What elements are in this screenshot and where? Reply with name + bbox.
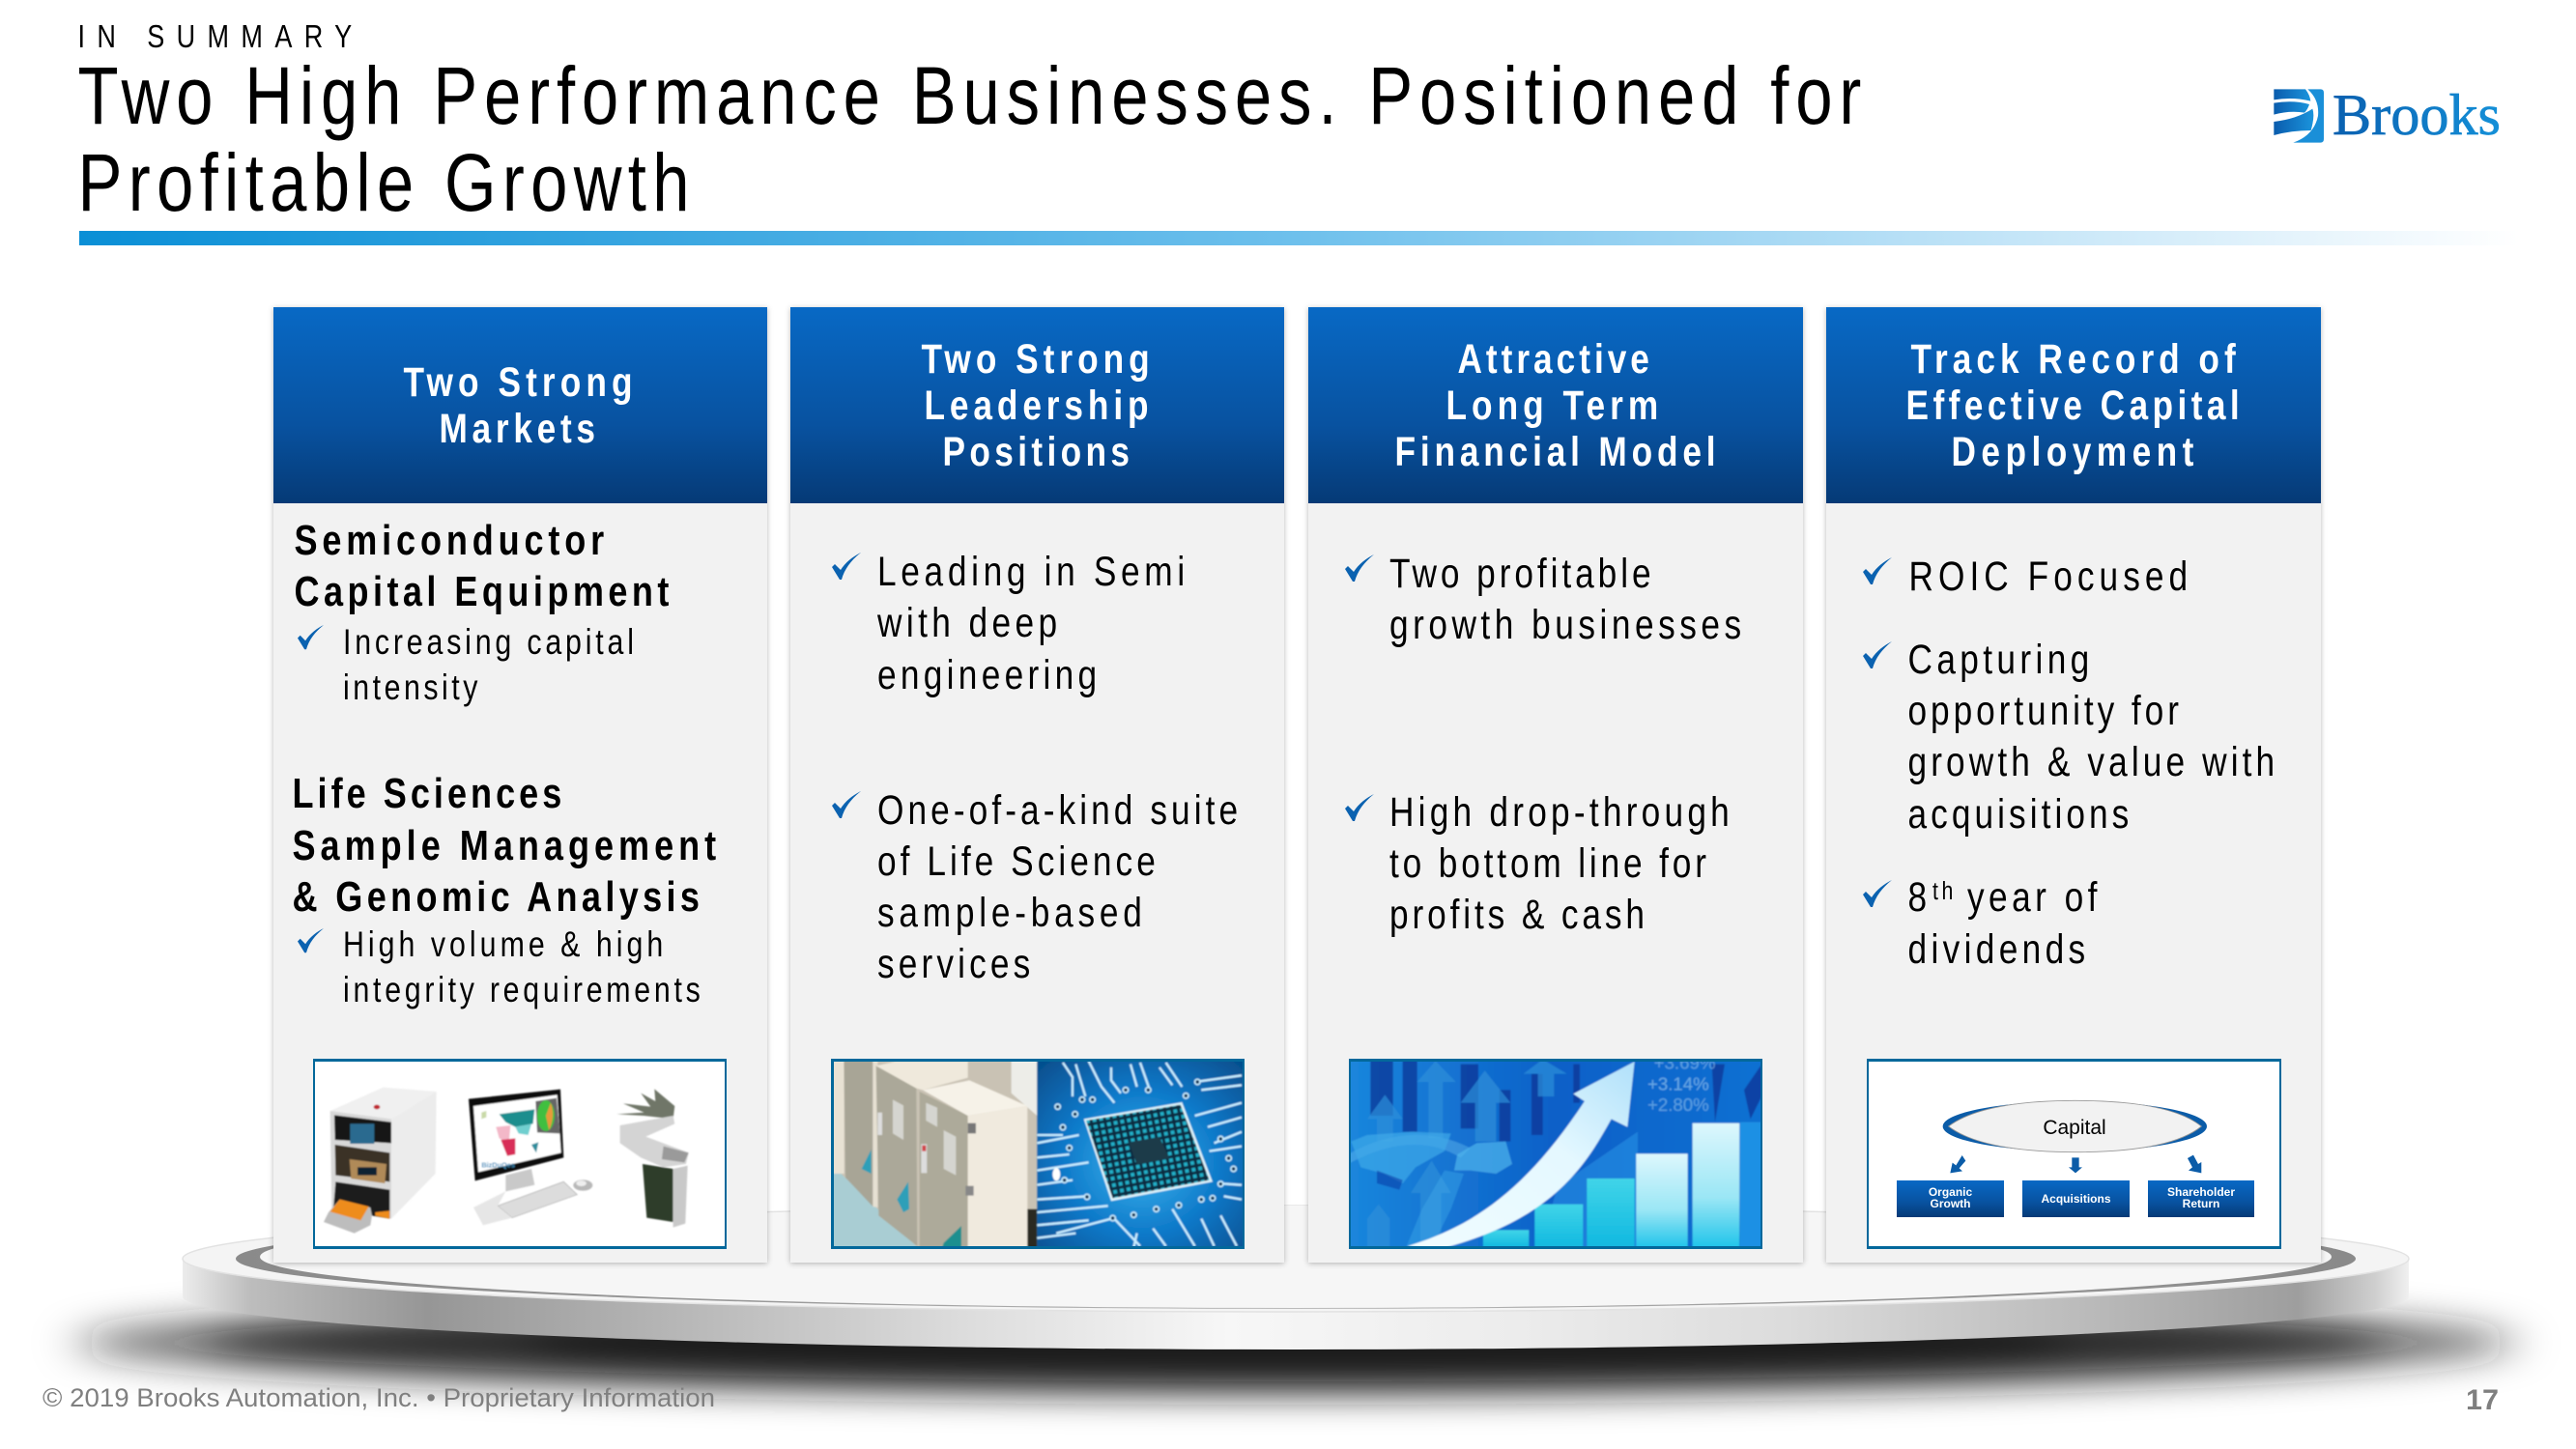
section label: IN SUMMARY: [77, 20, 352, 55]
header: [1308, 307, 1803, 503]
check: high volume: [298, 928, 324, 952]
panel: capital deployment: [1826, 307, 2321, 1263]
header: Two Strong: [922, 336, 1150, 383]
image: growth chart: +2.80%: [1647, 1094, 1709, 1115]
bullet: dividends: 8: [1907, 874, 1927, 921]
bullet: two profitable: growth businesses: [1389, 602, 1741, 648]
semiconductor bullet: [343, 622, 634, 708]
bullet: dividends: th: [1932, 877, 1953, 906]
semiconductor heading: Semiconductor: [294, 517, 604, 564]
image: growth chart: +3.69%: [1654, 1053, 1715, 1073]
box: organic growth: Organic: [1929, 1185, 1972, 1199]
bullet: two profitable: Two profitable: [1389, 551, 1651, 597]
header: Leadership: [924, 383, 1149, 429]
header: [273, 307, 767, 503]
panel: financial model: [1308, 307, 1803, 1263]
bullet: one of a kind: [877, 787, 1238, 987]
life sciences bullet: integrity requirements: [343, 970, 701, 1010]
check: dividends: [1863, 880, 1892, 907]
check: ROIC: [1863, 557, 1892, 584]
title: Two High Performance Businesses. Positioned for: [77, 51, 1861, 142]
bullet: one of a kind: services: [877, 941, 1030, 987]
bullet: one of a kind: One-of-a-kind suite: [877, 787, 1238, 834]
life sciences bullet: High volume & high: [343, 924, 663, 965]
footer copyright: © 2019 Brooks Automation, Inc. • Proprietary Information: [43, 1383, 715, 1412]
header: Effective Capital: [1905, 383, 2240, 429]
bullet: leading in semi: with deep: [876, 600, 1057, 646]
box: shareholder return: Shareholder: [2167, 1185, 2235, 1199]
arrow: to shareholder return: [2188, 1155, 2201, 1173]
bullet: one of a kind: sample-based: [877, 890, 1142, 936]
title: Profitable Growth: [77, 138, 690, 229]
bullet: capturing: acquisitions: [1907, 791, 2129, 838]
bullet: capturing: growth & value with: [1907, 739, 2275, 785]
bullet: capturing: opportunity for: [1907, 688, 2179, 734]
header: Financial Model: [1395, 429, 1716, 475]
header: Deployment: [1952, 429, 2193, 475]
life sciences heading: Sample Management: [292, 822, 716, 869]
image: growth chart: [1348, 1053, 1763, 1249]
platform: [183, 1206, 2409, 1350]
arrow: to organic growth: [1950, 1155, 1965, 1173]
check: capturing: [1863, 641, 1892, 668]
life sciences heading: & Genomic Analysis: [292, 873, 700, 921]
check: capital intensity: [298, 625, 324, 649]
page number: 17: [2466, 1384, 2499, 1416]
bullet: capturing: [1907, 637, 2275, 838]
header: Long Term: [1445, 383, 1658, 429]
panel: two strong markets: [273, 307, 767, 1263]
semiconductor heading: Capital Equipment: [294, 568, 669, 615]
title gradient bar: [79, 231, 2519, 245]
header: [790, 307, 1284, 503]
header: Attractive: [1457, 336, 1649, 383]
Brooks logo: Brooks: [2333, 83, 2501, 147]
semiconductor bullet: Increasing capital: [343, 622, 634, 663]
life sciences heading: Life Sciences: [292, 770, 561, 817]
bullet: dividends: [1907, 874, 2098, 973]
header: Markets: [439, 406, 595, 452]
bullet: ROIC: ROIC Focused: [1909, 554, 2188, 600]
bullet: leading in semi: Leading in Semi: [877, 549, 1185, 595]
bullet: high drop-through: [1389, 789, 1730, 938]
box: organic growth: Growth: [1931, 1197, 1971, 1210]
life sciences heading: [292, 770, 716, 921]
check: one of a kind: [832, 791, 861, 818]
image: products: [313, 1059, 727, 1249]
bullet: high drop-through: profits & cash: [1389, 892, 1645, 938]
header: [1826, 307, 2321, 503]
bullet: high drop-through: High drop-through: [1389, 789, 1730, 836]
check: leading in semi: [832, 553, 861, 580]
box: acquisitions: Acquisitions: [2041, 1192, 2111, 1206]
semiconductor bullet: intensity: [343, 668, 477, 708]
platform shadow: [76, 1293, 2515, 1393]
bullet: capturing: Capturing: [1907, 637, 2089, 683]
semiconductor heading: [294, 517, 669, 615]
arrow: to acquisitions: [2069, 1157, 2082, 1173]
bullet: leading in semi: engineering: [877, 652, 1097, 698]
panel: leadership positions: [790, 307, 1284, 1263]
box: organic growth: [1897, 1180, 2004, 1217]
capital label: Capital: [2043, 1117, 2106, 1139]
header: Two Strong: [404, 359, 632, 406]
header: Positions: [943, 429, 1130, 475]
bullet: dividends: dividends: [1907, 926, 2085, 973]
bullet: one of a kind: of Life Science: [877, 838, 1156, 885]
header: Track Record of: [1911, 336, 2237, 383]
box: acquisitions: [2022, 1180, 2130, 1217]
box: shareholder return: Return: [2183, 1197, 2219, 1210]
capital ellipse: [1943, 1100, 2207, 1152]
life sciences bullet: [343, 924, 701, 1010]
check: high drop-through: [1345, 794, 1374, 821]
image: growth chart: +3.14%: [1647, 1073, 1709, 1094]
bullet: dividends: year of: [1967, 874, 2098, 921]
box: shareholder return: [2148, 1180, 2254, 1217]
title: [77, 51, 1861, 229]
image: cabinets and chip: [831, 1058, 1246, 1249]
diagram: capital allocation: [1867, 1059, 2281, 1249]
bullet: leading in semi: [876, 549, 1185, 698]
bullet: high drop-through: to bottom line for: [1389, 840, 1706, 887]
image: products: BizDuQes: [481, 1160, 515, 1169]
bullet: two profitable: [1389, 551, 1741, 648]
check: two profitable: [1345, 554, 1374, 582]
